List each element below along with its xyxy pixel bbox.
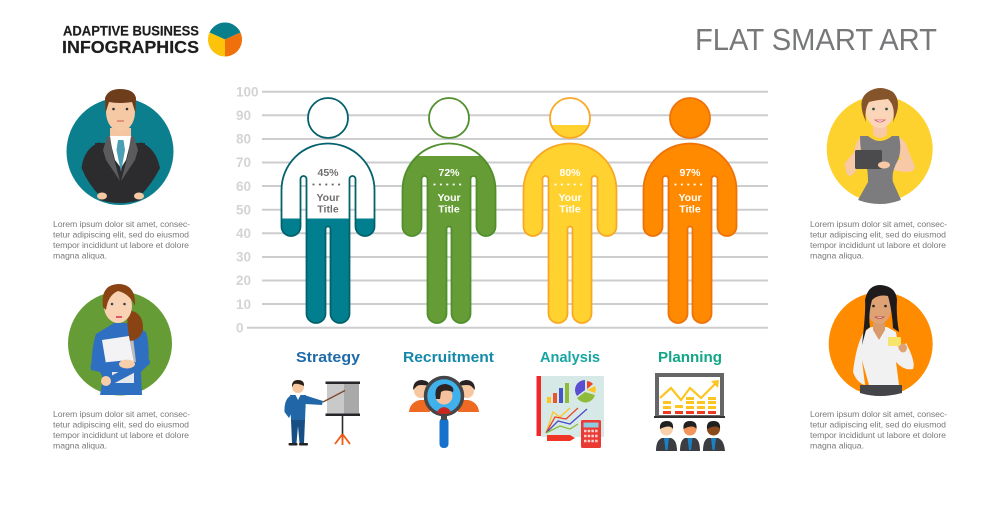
text block: woman orange: tetur adipiscing elit, sed do eiusmod: [810, 420, 946, 430]
figure: 72% recruitment: 72%: [438, 167, 460, 179]
text block: woman green: [53, 409, 190, 450]
title: FLAT SMART ART: [695, 22, 937, 57]
text block: man: magna aliqua.: [53, 250, 107, 260]
icon: presenter at board: [284, 380, 360, 446]
figure: 80% analysis: Your: [558, 192, 582, 204]
bar chart grid with axis: 30: [236, 250, 251, 264]
heading: Recruitment: Recruitment: [403, 349, 494, 366]
logo: Adaptive Business Infographics: INFOGRAPHICS: [62, 37, 199, 57]
text block: woman orange: Lorem ipsum dolor sit amet, consec-: [810, 409, 947, 419]
text block: woman orange: tempor incididunt ut labore et dolore: [810, 430, 946, 440]
bar chart grid with axis: 100: [236, 84, 259, 100]
panel: woman with yellow circle: [827, 88, 933, 204]
bar chart grid with axis: 50: [236, 202, 251, 218]
text block: woman yellow: Lorem ipsum dolor sit amet, consec-: [810, 219, 947, 229]
bar chart grid with axis: 80: [236, 132, 251, 147]
text block: woman orange: [810, 409, 947, 450]
icon: planning board and team: [654, 373, 725, 451]
figure: 97% planning: 97%: [679, 167, 701, 179]
figure: 45% strategy: [278, 98, 378, 328]
text block: woman green: Lorem ipsum dolor sit amet, consec-: [53, 409, 190, 419]
panel: woman with green circle: [68, 284, 172, 396]
heading: Planning: Planning: [658, 349, 722, 366]
figure: 80% analysis: 80%: [559, 167, 581, 179]
logo: Adaptive Business Infographics: [62, 22, 242, 57]
figure: 97% planning: Your: [678, 192, 702, 204]
figure: 45% strategy: Title: [317, 204, 339, 216]
figure: 80% analysis: Title: [559, 204, 581, 216]
figure: 97% planning: [644, 98, 736, 323]
text block: man: tempor incididunt ut labore et dolore: [53, 240, 189, 250]
text block: man: [53, 219, 190, 260]
heading: Strategy: Strategy: [296, 349, 361, 366]
figure: 97% planning: Title: [679, 204, 701, 216]
figure: 72% recruitment: Your: [437, 192, 461, 204]
panel: woman with orange circle: [829, 285, 933, 396]
bar chart grid with axis: 10: [236, 297, 251, 312]
text block: man: tetur adipiscing elit, sed do eiusmod: [53, 230, 189, 240]
text block: woman green: tetur adipiscing elit, sed do eiusmod: [53, 420, 189, 430]
logo: Adaptive Business Infographics: ADAPTIVE BUSINESS: [63, 24, 199, 38]
bar chart grid with axis: 60: [236, 179, 251, 194]
text block: man: Lorem ipsum dolor sit amet, consec-: [53, 219, 190, 229]
text block: woman green: tempor incididunt ut labore et dolore: [53, 430, 189, 440]
figure: 72% recruitment: [399, 98, 499, 331]
text block: woman yellow: tetur adipiscing elit, sed do eiusmod: [810, 230, 946, 240]
bar chart grid with axis: 90: [236, 108, 251, 123]
bar chart grid with axis: 70: [236, 155, 251, 170]
panel: man with teal circle: [66, 89, 174, 205]
text block: woman orange: magna aliqua.: [810, 440, 864, 450]
figure: 45% strategy: Your: [316, 192, 340, 204]
icon: analysis charts: [536, 376, 604, 448]
text block: woman yellow: magna aliqua.: [810, 250, 864, 260]
figure: 80% analysis: [524, 98, 616, 323]
figure: 45% strategy: 45%: [317, 167, 339, 179]
text block: woman yellow: tempor incididunt ut labore et dolore: [810, 240, 946, 250]
bar chart grid with axis: 20: [236, 273, 251, 288]
bar chart grid with axis: [236, 84, 768, 336]
bar chart grid with axis: 40: [236, 226, 251, 241]
figure: 72% recruitment: Title: [438, 204, 460, 216]
text block: woman green: magna aliqua.: [53, 440, 107, 450]
text block: woman yellow: [810, 219, 947, 260]
heading: Analysis: Analysis: [540, 349, 600, 366]
bar chart grid with axis: 0: [236, 320, 244, 336]
icon: recruitment magnifier: [409, 378, 479, 448]
